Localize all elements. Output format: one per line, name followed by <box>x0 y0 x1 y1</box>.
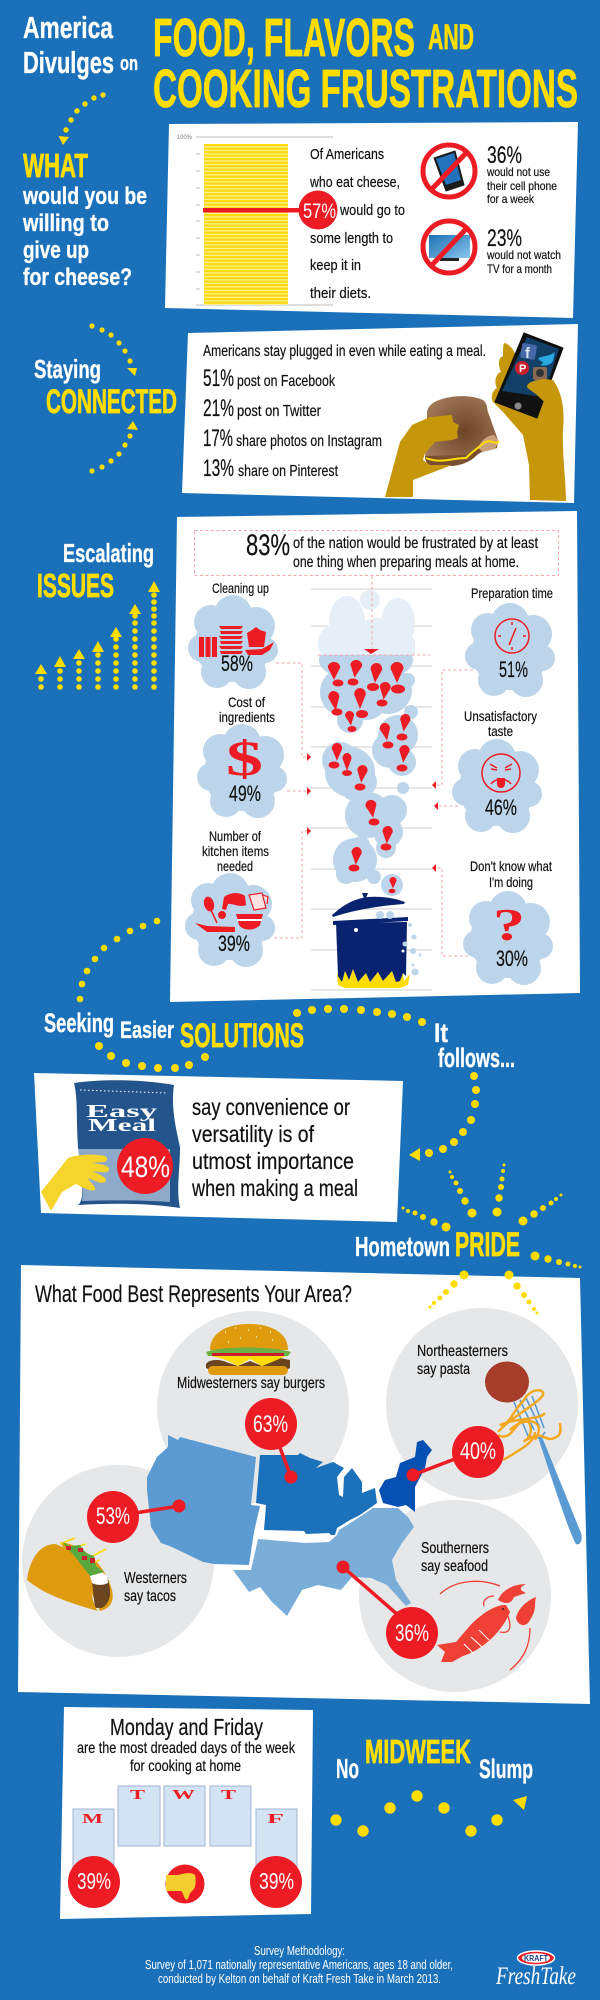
label: midwesterners: Midwesterners say burgers <box>177 1375 325 1392</box>
icon: thumbs down <box>166 1864 204 1904</box>
heading: no midweek slump: No <box>336 1753 359 1784</box>
text: of Americans who eat cheese: who eat cheese, <box>309 174 400 191</box>
icon: hand with phone: f <box>525 345 531 362</box>
labels: weekday letters: F <box>267 1811 284 1826</box>
item: unsatisfactory taste: 46% <box>485 795 517 820</box>
pin: 53 percent <box>87 1491 186 1543</box>
text: of Americans who eat cheese <box>309 146 405 302</box>
stat: Friday: 39% <box>259 1868 294 1894</box>
item: cleaning up: 58% <box>221 651 253 676</box>
icon: no phone <box>423 145 475 197</box>
label: westerners <box>124 1570 187 1605</box>
text: 23 percent: TV for a month <box>487 262 552 276</box>
stats: social media: post on Twitter <box>237 403 322 420</box>
panel: dreaded days <box>60 1707 313 1919</box>
text: 36 percent: 36% <box>487 142 522 169</box>
item: kitchen items: 39% <box>218 931 250 956</box>
text: 23 percent <box>486 225 561 276</box>
decoration: sun rays around pride <box>402 1164 582 1314</box>
title: America <box>23 10 114 45</box>
heading: no midweek slump: Slump <box>479 1754 533 1784</box>
heading: no midweek slump: MIDWEEK <box>365 1733 471 1770</box>
arrow: dots above solutions <box>293 1005 426 1026</box>
item: don't know what I'm doing: 30% <box>496 946 528 971</box>
callout: 83 percent: of the nation would be frustrated by at least <box>293 535 538 552</box>
title: on <box>120 53 138 75</box>
text: of Americans who eat cheese: Of Americans <box>310 146 384 163</box>
text: convenience: say convenience or <box>192 1094 350 1120</box>
heading: hometown pride: PRIDE <box>455 1226 520 1264</box>
labels: weekday letters: T <box>221 1787 236 1802</box>
heading: what would you give up: WHAT <box>23 147 88 184</box>
stat: 48 percent: 48% <box>121 1151 170 1184</box>
text: survey methodology: Survey of 1,071 nationally representative Americans, ages 18 and older, <box>145 1957 453 1972</box>
icon: no TV <box>423 221 475 273</box>
heading: what would you give up: would you be <box>22 183 147 210</box>
title <box>23 8 578 119</box>
icon: meal bag: Easy <box>86 1101 157 1121</box>
heading: no midweek slump <box>336 1733 533 1784</box>
icon: taco <box>27 1538 113 1611</box>
text: of Americans who eat cheese: some length to <box>310 230 393 247</box>
arrow: wave dots <box>330 1790 527 1837</box>
illustration: steam clouds <box>319 638 418 896</box>
panel: hometown foods <box>18 1265 590 1704</box>
pin: 40 percent <box>406 1426 504 1482</box>
logo: Kraft Fresh Take: FreshTake <box>495 1963 576 1990</box>
icon: hand <box>41 1155 109 1211</box>
heading: seeking easier solutions: SOLUTIONS <box>180 1017 304 1055</box>
text: 23 percent: would not watch <box>486 248 561 262</box>
heading: staying connected: CONNECTED <box>46 383 177 421</box>
labels: weekday letters: W <box>172 1787 196 1802</box>
stats: social media: post on Facebook <box>237 373 336 390</box>
map: midwest <box>256 1453 377 1535</box>
labels: weekday letters: T <box>130 1787 145 1802</box>
text: survey methodology <box>145 1943 453 1986</box>
item: preparation time: Preparation time <box>471 585 553 601</box>
item: unsatisfactory taste <box>452 708 542 833</box>
icon: lobster <box>437 1581 536 1670</box>
text: 36 percent <box>486 142 557 206</box>
label: northeasterners <box>417 1343 508 1378</box>
text: survey methodology: Survey Methodology: <box>254 1943 345 1958</box>
icon: meal bag: Meal <box>88 1115 156 1135</box>
item: cost of ingredients: 49% <box>229 781 261 806</box>
heading: seeking easier solutions: Easier <box>120 1017 174 1044</box>
pin: 63 percent <box>245 1398 298 1484</box>
icon: meal bag <box>74 1080 180 1208</box>
map: west <box>147 1435 260 1565</box>
heading: escalating issues <box>37 538 154 604</box>
arrow: dots to seeking solutions <box>77 918 160 1002</box>
logo: Kraft Fresh Take: KRAFT <box>524 1954 548 1963</box>
heading: escalating issues: ISSUES <box>37 567 114 604</box>
label: southerners <box>421 1540 489 1575</box>
item: cost of ingredients <box>197 694 287 818</box>
illustration: steam above line <box>318 590 415 655</box>
text: 36 percent: for a week <box>487 192 535 206</box>
icon: hand with sandwich <box>385 396 499 497</box>
heading: what would you give up: for cheese? <box>23 264 132 291</box>
illustration: exclamation marks <box>328 659 411 893</box>
panel: frustrations <box>170 511 580 1002</box>
pin: 53 percent: 53% <box>96 1503 130 1530</box>
heading: what food: What Food Best Represents Your Area? <box>35 1281 352 1308</box>
text: Monday and Friday <box>77 1714 296 1775</box>
label: southerners: Southerners <box>421 1540 489 1557</box>
heading: staying connected: Staying <box>34 354 101 384</box>
text: 36 percent: their cell phone <box>487 179 557 193</box>
heading: what would you give up <box>22 147 147 291</box>
item: cost of ingredients: $ <box>226 730 263 786</box>
item: don't know what I'm doing: ? <box>493 899 525 950</box>
text: of Americans who eat cheese: their diets. <box>310 285 371 302</box>
text: plugged in: Americans stay plugged in even while eating a meal. <box>203 343 486 360</box>
text: convenience: versatility is of <box>192 1121 315 1147</box>
pin: 36 percent <box>336 1560 438 1659</box>
stat: 48 percent <box>117 1138 173 1194</box>
arrow: dots down to connected <box>89 323 137 376</box>
panel: easy meal <box>34 1073 403 1222</box>
stats: social media: 21% <box>203 395 234 422</box>
label: westerners: say tacos <box>124 1588 176 1605</box>
text: 23 percent: 23% <box>487 225 522 252</box>
item: cost of ingredients: Cost of <box>228 694 265 710</box>
logo: Kraft Fresh Take <box>495 1951 576 1990</box>
region circles <box>22 1308 578 1692</box>
labels: weekday letters: M <box>82 1811 103 1826</box>
arrow: dots below solutions <box>95 1042 209 1072</box>
text: Monday and Friday: are the most dreaded days of the week <box>77 1740 296 1757</box>
heading: it follows: It <box>434 1018 448 1048</box>
heading: staying connected <box>34 354 177 421</box>
map: northeast <box>379 1440 432 1512</box>
connector: top dashed arrow <box>318 576 430 655</box>
heading: it follows: follows... <box>438 1043 515 1073</box>
text: of Americans who eat cheese: keep it in <box>310 257 361 274</box>
panel: cheese <box>165 122 578 318</box>
icon: fork with pasta <box>485 1362 582 1544</box>
stats: social media: 13% <box>203 455 234 482</box>
label: southerners: say seafood <box>421 1558 488 1575</box>
arrow: dots up to connected <box>89 421 138 474</box>
item: kitchen items: Number of <box>209 828 261 844</box>
text: Monday and Friday: for cooking at home <box>130 1758 241 1775</box>
chart: cheese bar <box>177 135 338 305</box>
heading: seeking easier solutions: Seeking <box>44 1008 114 1038</box>
icon: hand with phone: P <box>519 363 526 375</box>
stat: Friday <box>250 1856 302 1908</box>
chart: cheese bar: 57% <box>303 200 336 223</box>
chart: grid lines <box>311 589 432 990</box>
panel: connected <box>182 324 578 503</box>
illustration: boiling pot <box>332 893 422 988</box>
label: westerners: Westerners <box>124 1570 187 1587</box>
stats: social media <box>203 365 382 482</box>
pin: 40 percent: 40% <box>460 1438 496 1465</box>
heading: seeking easier solutions <box>44 1008 304 1055</box>
stats: social media: share photos on Instagram <box>236 433 382 450</box>
chart: cheese bar: 100% <box>177 135 193 141</box>
text: 36 percent: would not use <box>486 165 550 179</box>
title: Divulges <box>23 45 114 80</box>
callout: 83 percent: one thing when preparing meals at home. <box>293 554 519 571</box>
text: convenience: utmost importance <box>192 1148 354 1174</box>
stats: social media: 17% <box>203 425 233 452</box>
arrows: rising dotted columns <box>35 581 160 687</box>
label: northeasterners: say pasta <box>417 1361 470 1378</box>
text: convenience <box>191 1094 358 1201</box>
chart: weekdays <box>73 1786 297 1869</box>
item: don't know what I'm doing: Don't know what <box>470 858 552 874</box>
connectors: dashed arrows to pot <box>274 663 473 956</box>
heading: what would you give up: willing to <box>22 210 109 237</box>
icon: burger <box>206 1324 291 1375</box>
text: convenience: when making a meal <box>191 1175 358 1201</box>
arrow: title to cheese <box>58 92 106 145</box>
title: FOOD, FLAVORS <box>153 8 415 68</box>
heading: hometown pride: Hometown <box>355 1231 450 1262</box>
text: of Americans who eat cheese: would go to <box>339 202 405 219</box>
item: don't know what I'm doing <box>463 858 553 985</box>
heading: it follows <box>434 1018 515 1073</box>
stat: Monday: 39% <box>77 1868 111 1894</box>
stats: social media: share on Pinterest <box>238 463 338 480</box>
item: don't know what I'm doing: I'm doing <box>489 874 533 890</box>
item: preparation time: 51% <box>499 657 528 682</box>
item: preparation time <box>465 585 555 697</box>
text: survey methodology: conducted by Kelton on behalf of Kraft Fresh Take in March 2013. <box>158 1971 441 1986</box>
stats: social media: 51% <box>203 365 234 392</box>
text: Monday and Friday: Monday and Friday <box>110 1714 263 1740</box>
pin: 63 percent: 63% <box>253 1411 288 1438</box>
stat: Monday <box>68 1856 120 1908</box>
item: unsatisfactory taste: Unsatisfactory <box>464 708 537 724</box>
arrow: dots to easy meal <box>409 1072 480 1161</box>
pin: 36 percent: 36% <box>395 1620 429 1647</box>
item: cleaning up: Cleaning up <box>212 580 269 596</box>
heading: escalating issues: Escalating <box>63 538 154 568</box>
item: kitchen items <box>185 828 275 967</box>
item: cleaning up <box>188 580 278 689</box>
item: kitchen items: needed <box>217 858 253 874</box>
heading: what would you give up: give up <box>23 237 89 264</box>
icon: hand with phone <box>492 333 566 501</box>
item: kitchen items: kitchen items <box>202 843 269 859</box>
labels: weekday letters <box>82 1787 284 1826</box>
item: unsatisfactory taste: taste <box>488 723 513 739</box>
callout: 83 percent <box>194 529 558 576</box>
label: northeasterners: Northeasterners <box>417 1343 508 1360</box>
title: AND <box>428 18 474 57</box>
map: south <box>233 1508 414 1616</box>
item: cost of ingredients: ingredients <box>219 709 275 725</box>
callout: 83 percent: 83% <box>246 529 290 562</box>
